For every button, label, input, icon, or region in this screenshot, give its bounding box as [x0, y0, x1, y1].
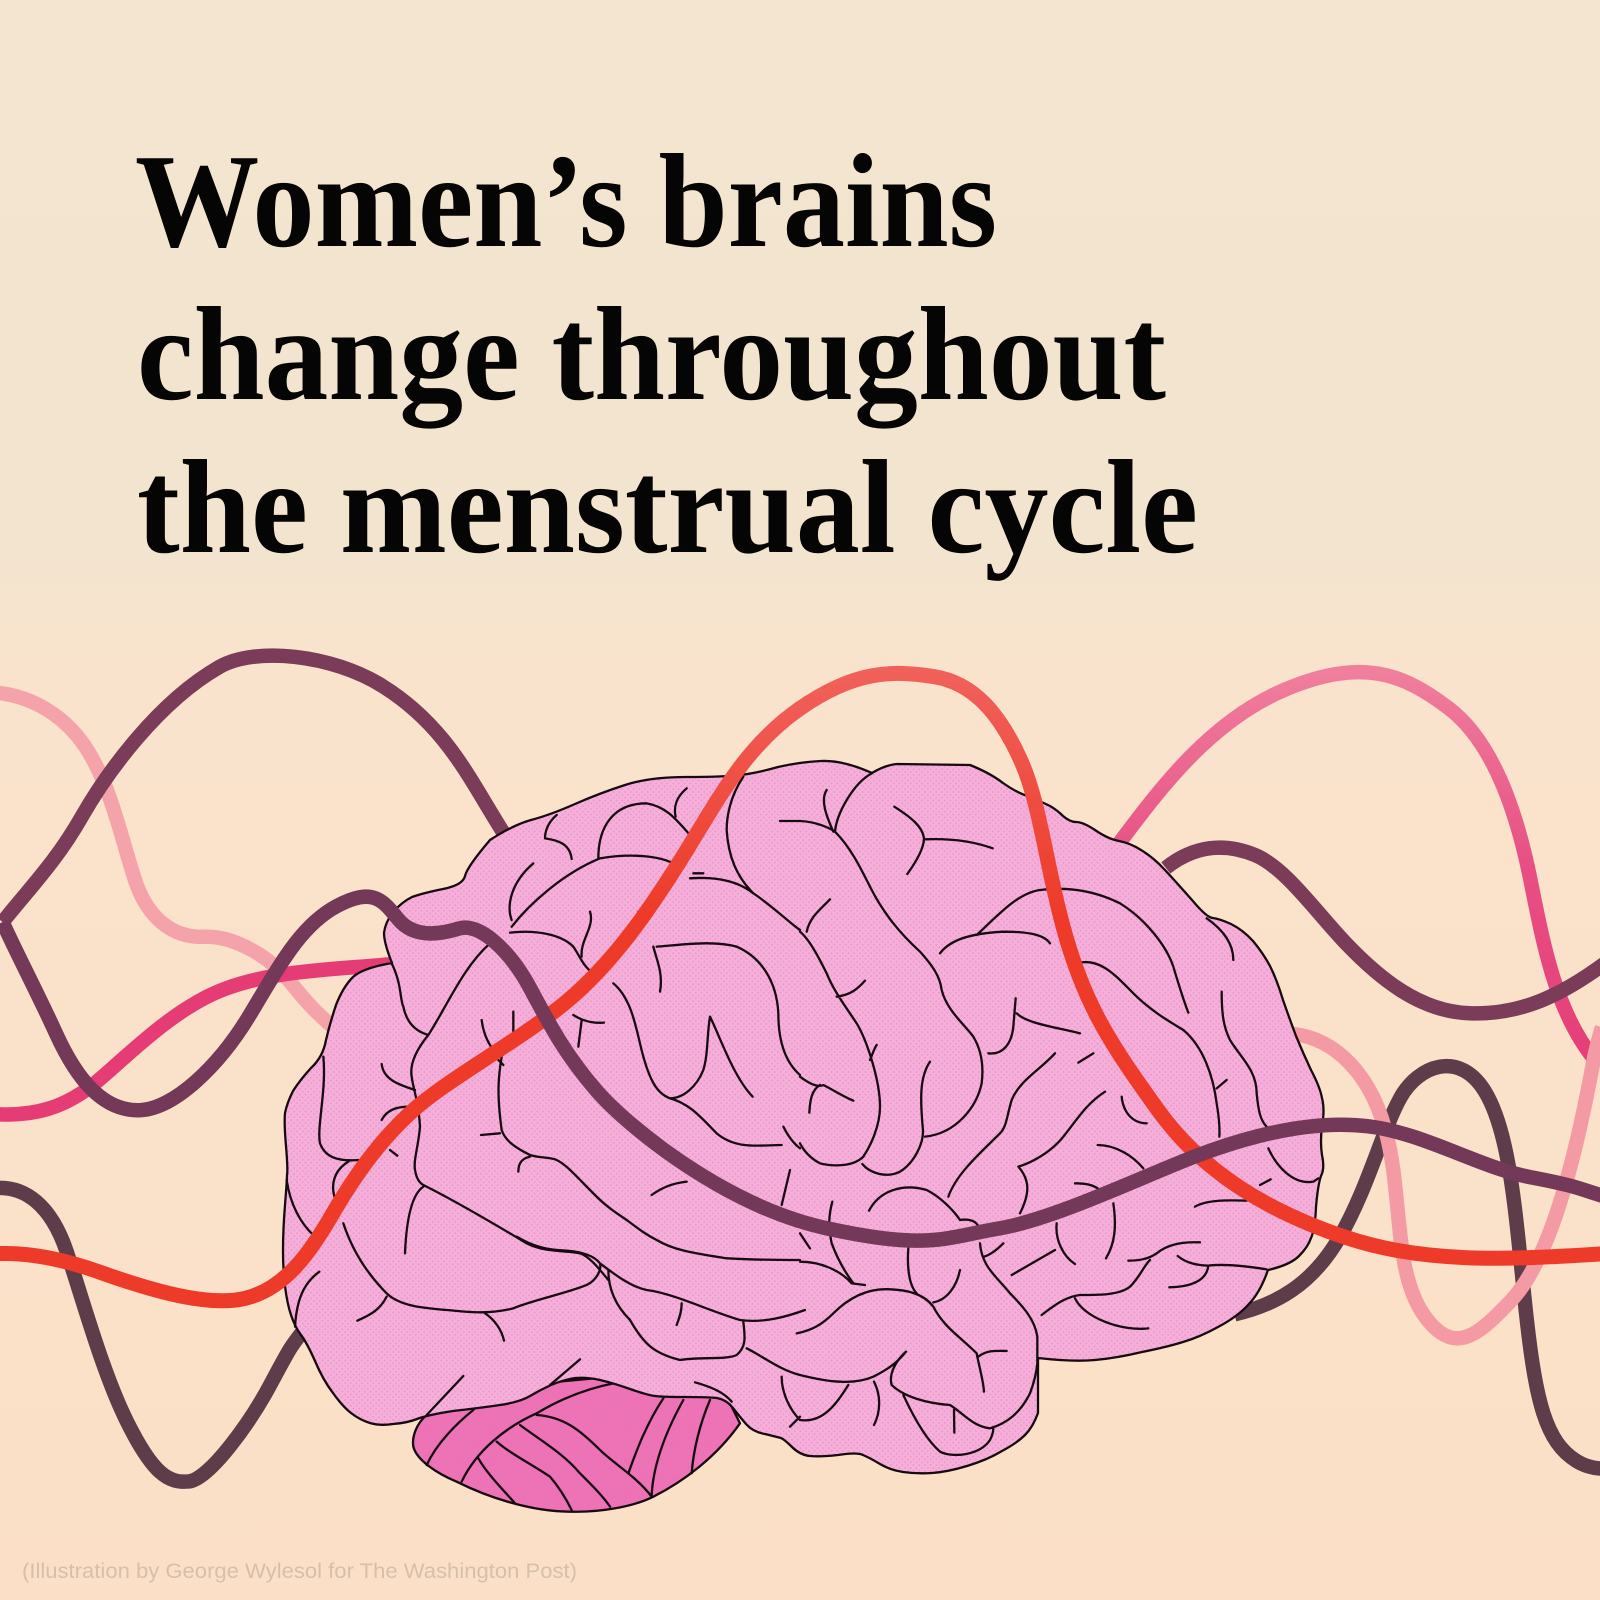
wave: dark brown, right: [1235, 1066, 1600, 1469]
folds: upper left: [319, 777, 800, 1280]
brain outline: [283, 761, 1324, 1473]
wave: purple, crossing brain: [3, 897, 1600, 1241]
cerebellum: [413, 1377, 740, 1512]
wave: pale pink, left: [0, 692, 337, 1031]
brain: [283, 761, 1324, 1512]
folds: lower left: [287, 1180, 805, 1427]
folds: upper right: [800, 773, 1318, 1283]
wave: rose, right: [1117, 672, 1597, 1062]
image credit: (Illustration by George Wylesol for The Washington Post): [22, 1560, 577, 1583]
wave: red, crossing brain: [0, 673, 1600, 1301]
folds: lower right: [797, 1242, 1267, 1455]
title line 1: Women’s brains: [135, 127, 997, 275]
waves behind the brain: [0, 656, 1600, 1482]
wave: rose, left: [0, 964, 398, 1114]
wave: dark brown, left: [0, 1188, 306, 1482]
title line 3: the menstrual cycle: [137, 433, 1198, 581]
title: [135, 127, 1198, 581]
wave: purple, upper right: [1166, 848, 1600, 1013]
wave: pale pink, right: [1286, 1027, 1600, 1338]
title line 2: change throughout: [137, 280, 1166, 429]
waves in front of the brain: [0, 673, 1600, 1301]
wave: purple, upper left: [3, 656, 508, 922]
